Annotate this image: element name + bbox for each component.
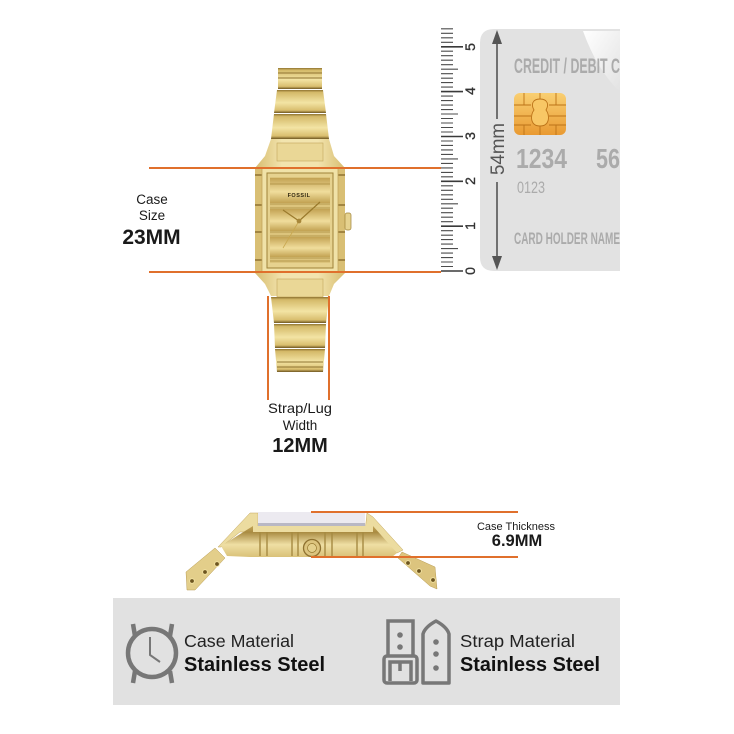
watch hands [283, 202, 320, 221]
watch dial [270, 177, 330, 263]
card title: CREDIT / DEBIT C [514, 55, 620, 78]
side crown [304, 540, 320, 556]
case size label: 23MM [122, 226, 181, 249]
left bracelet [186, 548, 225, 590]
ruler numbers [462, 43, 478, 275]
case size guide lines [149, 167, 441, 273]
ruler [441, 29, 478, 275]
strap material text: Strap Material [460, 631, 575, 651]
watch front view [255, 68, 351, 372]
case thickness guide lines [311, 511, 518, 558]
strap width label: Width [283, 418, 317, 433]
credit card [480, 29, 620, 271]
case size label: Case [136, 192, 168, 207]
arrow: 54mm dimension [492, 30, 502, 270]
watch side view [186, 512, 437, 590]
strap material text [460, 631, 600, 676]
case material text: Stainless Steel [184, 654, 325, 676]
icon: strap [384, 621, 449, 683]
card glare [583, 31, 620, 92]
ruler numbers: 1 [462, 222, 478, 230]
upper bracelet [271, 68, 329, 139]
strap width label [268, 400, 332, 457]
icon: watch [128, 624, 176, 683]
case thickness label: Case Thickness [477, 521, 556, 533]
lug links [277, 143, 323, 161]
54mm label: 54mm [488, 123, 509, 175]
case size label: Size [139, 208, 165, 223]
right shoulder [365, 513, 403, 553]
panel: materials [113, 598, 620, 705]
ruler numbers: 3 [462, 132, 478, 140]
crown [345, 213, 351, 230]
ruler numbers: 0 [462, 267, 478, 275]
brand name: FOSSIL [288, 193, 311, 199]
ruler numbers: 2 [462, 177, 478, 185]
right bracelet [398, 552, 437, 589]
ruler numbers: 4 [462, 87, 478, 95]
glass [258, 512, 365, 526]
side case [221, 526, 397, 557]
card chip [514, 93, 566, 135]
lower bracelet [271, 297, 329, 372]
card holder name: CARD HOLDER NAME [514, 230, 620, 248]
watch case [255, 139, 345, 297]
card number: 1234 [516, 143, 567, 174]
strap width guide lines [267, 296, 330, 400]
strap material text: Stainless Steel [460, 654, 600, 676]
credit card: 56 [596, 143, 620, 174]
ruler ticks [441, 29, 458, 266]
case size label [122, 192, 181, 249]
strap width label: 12MM [272, 435, 328, 457]
ruler numbers: 5 [462, 43, 478, 51]
case material text [184, 631, 325, 676]
case thickness label [477, 521, 556, 550]
case material text: Case Material [184, 631, 294, 651]
strap width label: Strap/Lug [268, 400, 332, 416]
pins [190, 561, 435, 583]
card body [480, 29, 620, 271]
left shoulder [218, 513, 258, 547]
case thickness label: 6.9MM [492, 532, 542, 550]
card small number: 0123 [517, 178, 545, 197]
